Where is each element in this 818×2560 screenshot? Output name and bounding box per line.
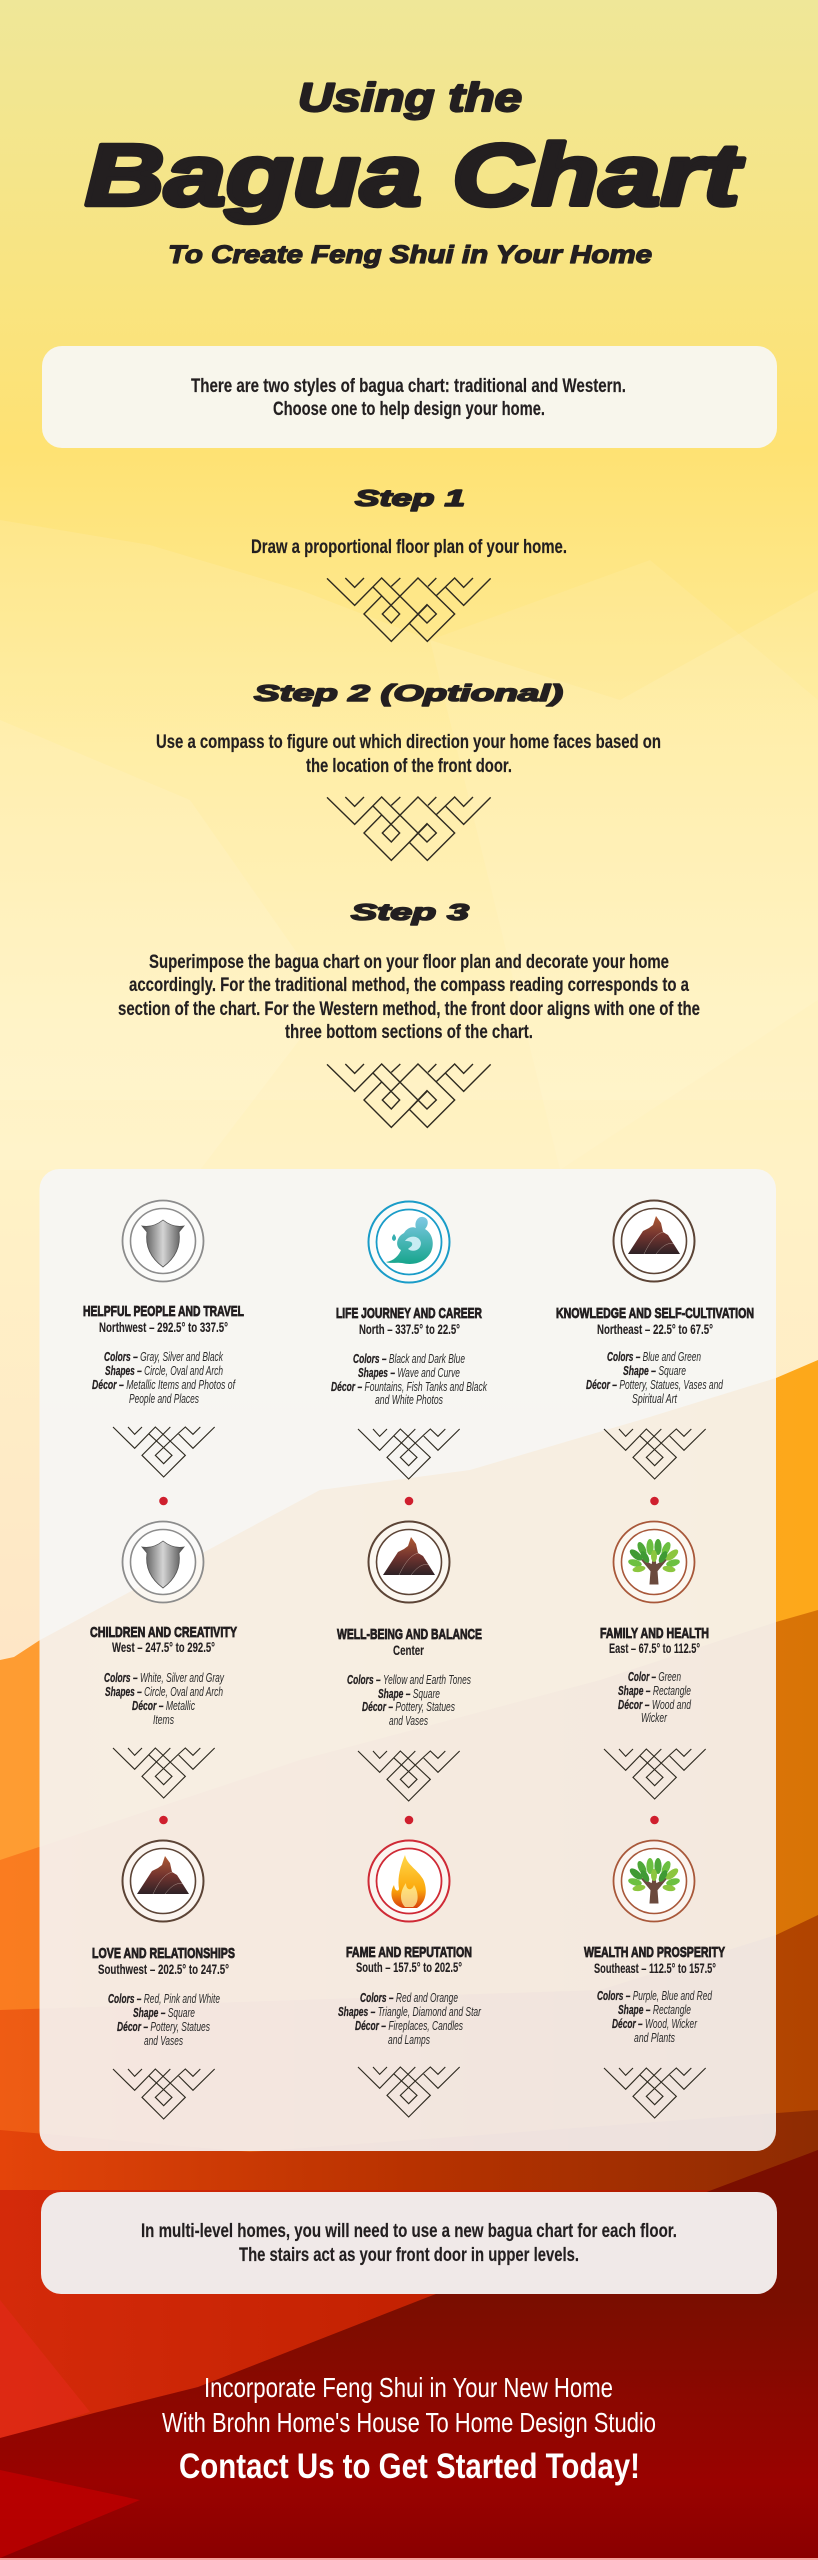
- knot divider: [604, 1429, 706, 1479]
- details: Décor – Pottery, Statues: [117, 2019, 210, 2034]
- details: Décor – Pottery, Statues, Vases and: [586, 1377, 723, 1392]
- compass direction: Northwest – 292.5° to 337.5°: [99, 1319, 228, 1335]
- compass direction: Center: [393, 1642, 424, 1658]
- icon: flame: [368, 1840, 450, 1922]
- knot divider: [604, 1749, 706, 1799]
- icon: tree: [614, 1840, 694, 1922]
- details: Color – Green: [628, 1669, 681, 1684]
- title line: Bagua Chart: Bagua Chart: [85, 127, 744, 224]
- step 2 heading: Step 2 (Optional): [254, 680, 563, 706]
- icon: mountain: [614, 1200, 694, 1282]
- details: [104, 1670, 225, 1727]
- details: Shapes – Circle, Oval and Arch: [105, 1363, 223, 1378]
- step 1 text: Draw a proportional floor plan of your home.: [251, 537, 567, 558]
- details: Colors – Yellow and Earth Tones: [347, 1672, 471, 1687]
- step 3 text: three bottom sections of the chart.: [285, 1022, 533, 1043]
- details: [108, 1991, 220, 2048]
- details: [338, 1990, 481, 2047]
- section: helpful people and travel: [83, 1200, 244, 1477]
- step 3 text: [118, 952, 700, 1043]
- step 3: [118, 899, 700, 1127]
- step 1 heading: Step 1: [355, 485, 465, 511]
- details: Colors – White, Silver and Gray: [104, 1670, 225, 1685]
- details: and White Photos: [375, 1392, 443, 1407]
- compass direction: Southeast – 112.5° to 157.5°: [594, 1960, 716, 1976]
- details: [347, 1672, 471, 1728]
- knot divider: [327, 578, 491, 641]
- details: Colors – Red, Pink and White: [108, 1991, 220, 2006]
- icon: metal shield: [122, 1522, 204, 1602]
- section heading: WEALTH AND PROSPERITY: [584, 1945, 725, 1961]
- section heading: HELPFUL PEOPLE AND TRAVEL: [83, 1304, 244, 1320]
- compass direction: North – 337.5° to 22.5°: [359, 1321, 460, 1337]
- section heading: FAME AND REPUTATION: [346, 1945, 472, 1961]
- knot divider: [358, 1751, 460, 1801]
- details: Colors – Gray, Silver and Black: [104, 1349, 224, 1364]
- details: and Vases: [144, 2033, 183, 2048]
- details: Shapes – Wave and Curve: [358, 1365, 460, 1380]
- row separator dots 2: [159, 1816, 659, 1824]
- details: Décor – Wood and: [618, 1697, 692, 1712]
- details: and Lamps: [388, 2032, 430, 2047]
- details: [331, 1351, 488, 1407]
- row separator dots 1: [159, 1497, 659, 1505]
- closing call to action: Contact Us to Get Started Today!: [179, 2447, 640, 2486]
- details: Colors – Purple, Blue and Red: [597, 1988, 712, 2003]
- knot divider: [358, 2067, 460, 2117]
- knot divider: [604, 2068, 706, 2118]
- details: Wicker: [641, 1710, 667, 1725]
- details: Colors – Red and Orange: [360, 1990, 458, 2005]
- title: [85, 76, 744, 269]
- section heading: LIFE JOURNEY AND CAREER: [336, 1306, 482, 1322]
- step 2 text: Use a compass to figure out which direction your home faces based on: [156, 732, 661, 753]
- knot divider: [358, 1429, 460, 1479]
- knot divider: [327, 797, 491, 860]
- multi-level callout box: The stairs act as your front door in upper levels.: [239, 2245, 579, 2266]
- details: [597, 1988, 712, 2045]
- icon: water wave: [368, 1202, 450, 1282]
- details: Shapes – Circle, Oval and Arch: [105, 1684, 223, 1699]
- closing call to action: Incorporate Feng Shui in Your New Home: [204, 2372, 613, 2403]
- compass direction: Northeast – 22.5° to 67.5°: [597, 1321, 713, 1337]
- title line: Using the: Using the: [298, 76, 522, 120]
- details: Shape – Rectangle: [618, 2002, 691, 2017]
- details: [618, 1669, 692, 1725]
- subtitle: To Create Feng Shui in Your Home: [168, 241, 652, 269]
- details: Décor – Fountains, Fish Tanks and Black: [331, 1379, 488, 1394]
- section: fame and reputation: [338, 1840, 481, 2117]
- closing call to action: With Brohn Home's House To Home Design Studio: [162, 2407, 656, 2438]
- details: [586, 1349, 723, 1406]
- details: Shape – Square: [623, 1363, 686, 1378]
- section: family and health: [600, 1522, 709, 1799]
- section: well-being and balance: [337, 1522, 482, 1801]
- panel: bagua sections: [40, 1169, 776, 2151]
- details: Décor – Metallic: [132, 1698, 195, 1713]
- details: Colors – Black and Dark Blue: [353, 1351, 465, 1366]
- details: and Vases: [389, 1713, 428, 1728]
- section: love and relationships: [92, 1840, 235, 2119]
- icon: metal shield: [122, 1200, 204, 1282]
- section: life journey and career: [331, 1202, 488, 1479]
- knot divider: [113, 1748, 215, 1798]
- details: and Plants: [634, 2030, 675, 2045]
- section heading: WELL-BEING AND BALANCE: [337, 1627, 482, 1643]
- knot divider: [113, 2069, 215, 2119]
- compass direction: West – 247.5° to 292.5°: [112, 1639, 215, 1655]
- section: wealth and prosperity: [584, 1840, 725, 2118]
- details: Décor – Metallic Items and Photos of: [92, 1377, 236, 1392]
- step 2 text: [156, 732, 661, 777]
- section: knowledge and self-cultivation: [556, 1200, 754, 1479]
- multi-level callout box: [41, 2192, 777, 2294]
- icon: mountain: [122, 1840, 204, 1922]
- step 2 text: the location of the front door.: [306, 756, 512, 777]
- section heading: FAMILY AND HEALTH: [600, 1626, 709, 1642]
- knot divider: [327, 1064, 491, 1127]
- details: Spiritual Art: [632, 1391, 678, 1406]
- details: Shape – Square: [133, 2005, 195, 2020]
- multi-level callout box: In multi-level homes, you will need to use a new bagua chart for each floor.: [141, 2221, 677, 2242]
- icon: mountain: [368, 1522, 450, 1602]
- step 2: [156, 680, 661, 860]
- knot divider: [113, 1427, 215, 1477]
- section: children and creativity: [90, 1522, 237, 1798]
- step 1: [251, 485, 567, 641]
- compass direction: East – 67.5° to 112.5°: [609, 1640, 700, 1656]
- intro callout box: [42, 346, 777, 448]
- section heading: CHILDREN AND CREATIVITY: [90, 1625, 237, 1641]
- details: Colors – Blue and Green: [607, 1349, 701, 1364]
- details: [92, 1349, 236, 1406]
- details: People and Places: [129, 1391, 199, 1406]
- details: Décor – Fireplaces, Candles: [355, 2018, 463, 2033]
- closing call to action: [162, 2372, 656, 2486]
- details: Items: [153, 1712, 174, 1727]
- icon: tree: [614, 1522, 694, 1602]
- step 3 text: Superimpose the bagua chart on your floor plan and decorate your home: [149, 952, 669, 973]
- intro callout box: There are two styles of bagua chart: traditional and Western.: [191, 376, 626, 397]
- details: Shape – Square: [378, 1686, 440, 1701]
- compass direction: Southwest – 202.5° to 247.5°: [98, 1961, 229, 1977]
- step 3 heading: Step 3: [351, 899, 469, 925]
- compass direction: South – 157.5° to 202.5°: [356, 1959, 462, 1975]
- intro callout box: Choose one to help design your home.: [273, 399, 545, 420]
- details: Décor – Wood, Wicker: [612, 2016, 697, 2031]
- details: Shapes – Triangle, Diamond and Star: [338, 2004, 481, 2019]
- details: Décor – Pottery, Statues: [362, 1699, 455, 1714]
- details: Shape – Rectangle: [618, 1683, 691, 1698]
- section heading: LOVE AND RELATIONSHIPS: [92, 1946, 235, 1962]
